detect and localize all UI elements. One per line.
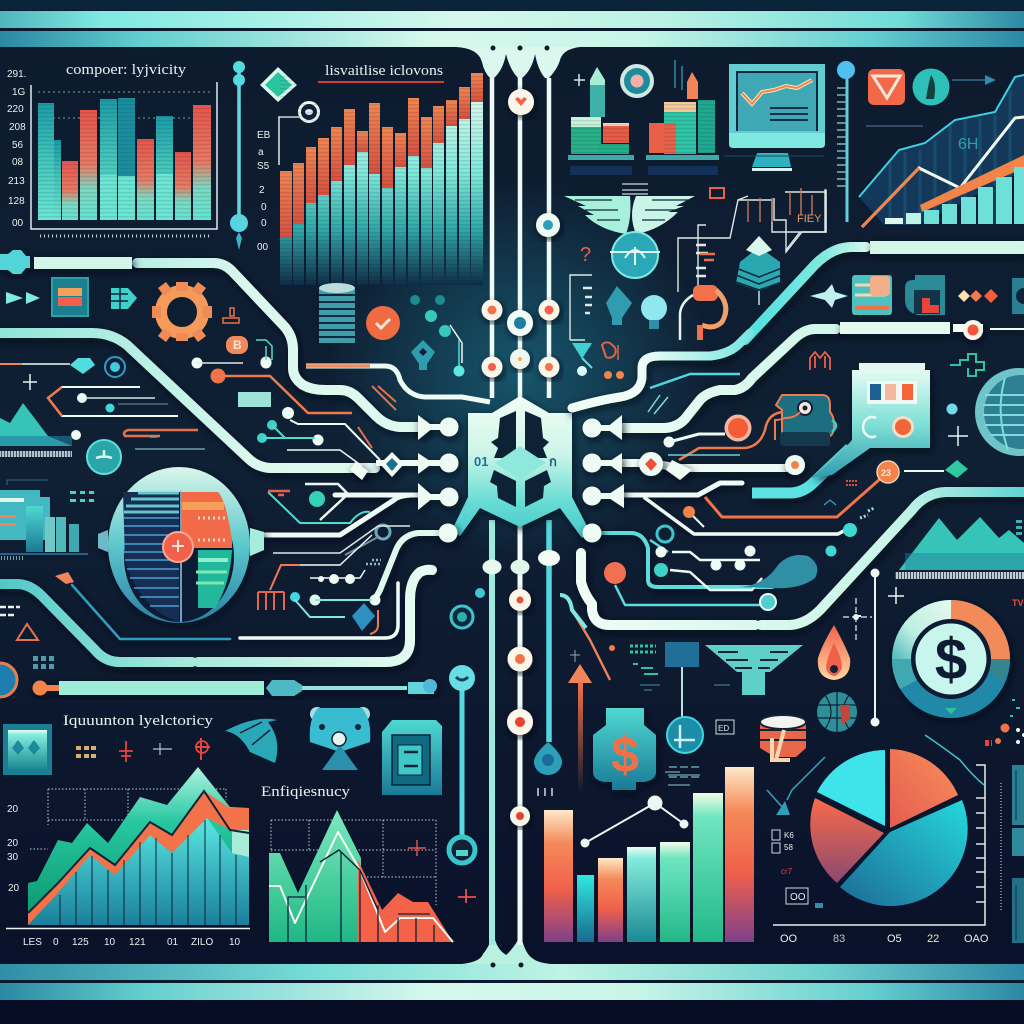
line overlay	[580, 796, 688, 848]
ed tag: ED	[718, 724, 729, 733]
circuit block icon	[775, 395, 836, 446]
y axis labels: 08	[12, 157, 24, 168]
icon: teal button	[87, 440, 121, 474]
x axis labels: ZILO	[191, 937, 213, 948]
mountain chart left	[0, 403, 72, 457]
pie x axis labels	[780, 933, 989, 945]
top frame bands	[0, 0, 1024, 78]
x axis labels: 121	[129, 937, 146, 948]
right-edge blocks	[1012, 765, 1024, 943]
x axis labels: 125	[72, 937, 89, 948]
x axis labels	[23, 937, 241, 948]
right arrow terminals	[582, 415, 805, 542]
small dots bottom right	[985, 700, 1024, 746]
pie side labels: OO	[790, 892, 806, 903]
slider: tick ruler	[837, 61, 855, 222]
chart: top-right line area	[859, 75, 1024, 227]
icon: document	[382, 720, 442, 795]
chart label: 6H	[958, 136, 978, 153]
chart: pie	[810, 749, 968, 906]
slider: vertical cyan	[230, 61, 248, 250]
icon: square card	[52, 278, 88, 316]
y axis labels: 1G	[12, 87, 26, 98]
chart: stacked bars	[257, 63, 483, 285]
hub label left: 01	[474, 454, 488, 469]
icon: layered stack	[736, 236, 782, 291]
icon: hexa pin	[411, 340, 435, 370]
y axis labels: 20	[7, 838, 19, 849]
pie x axis labels: 83	[833, 933, 845, 945]
icon: teal gauge circle	[667, 717, 703, 753]
x axis labels: 10	[229, 937, 241, 948]
top-left connector bar	[0, 250, 132, 274]
y axis labels: a	[258, 147, 264, 158]
ed tag	[716, 720, 734, 734]
icon: card	[852, 275, 892, 315]
schematic dashes	[583, 245, 715, 313]
emblem: t wings	[705, 645, 803, 695]
pie side labels	[772, 830, 823, 908]
icon: mountain square	[3, 724, 52, 775]
orange tip thin wire	[55, 572, 74, 584]
icon: orange cylinder	[760, 715, 806, 760]
left icon row	[6, 278, 464, 376]
pie x axis labels: 22	[927, 933, 939, 945]
icon: orange pipe	[680, 285, 726, 340]
icon: small orange glyph	[223, 308, 239, 323]
chart title: lisvaitlise iclovons	[325, 63, 443, 79]
icon: shell	[225, 719, 277, 763]
icon: mini globe	[817, 692, 857, 732]
icon: bear robot	[310, 707, 370, 770]
icon: folder	[905, 275, 945, 315]
thin right connectors	[560, 374, 944, 680]
x axis labels: 01	[167, 937, 179, 948]
icon: orange b badge	[226, 336, 272, 368]
green-orange small circuit	[258, 484, 410, 634]
right edge fragment text: TV	[1012, 598, 1024, 608]
chart: company liquidity bars	[7, 62, 217, 236]
icon: flame	[818, 625, 850, 680]
icon: teal dollar tag	[593, 708, 656, 790]
right circuit traces	[572, 247, 1024, 625]
thin schematic frames: FIEY	[797, 213, 822, 225]
upper-right block chart 2	[646, 60, 719, 175]
icon: gem	[70, 358, 95, 374]
emblem: wings	[564, 184, 695, 278]
y axis labels: 128	[8, 196, 25, 207]
y axis labels: 20	[7, 804, 19, 815]
small orange and green glyphs right	[572, 342, 984, 518]
globe dashboard	[98, 467, 264, 623]
y axis labels	[257, 130, 271, 253]
orange connectors	[192, 346, 490, 466]
mountain chart right	[895, 517, 1024, 579]
node: orange 23: 23	[881, 468, 891, 478]
orange connector with pale lines	[0, 363, 22, 365]
misc lines near center bottom	[538, 685, 734, 796]
node: orange 23	[877, 461, 899, 483]
icon: edge square	[1012, 278, 1024, 314]
icon: teal dollar tag: $	[611, 727, 639, 783]
device panel	[810, 363, 930, 478]
icon: cylinder	[319, 283, 355, 343]
y axis labels: 291.	[7, 69, 26, 80]
y axis labels: 0	[261, 218, 267, 229]
y axis labels: 00	[257, 242, 269, 253]
pins	[454, 340, 464, 376]
left arrow terminals	[350, 415, 458, 542]
circuit cluster	[48, 387, 205, 449]
upper-right block chart 1	[568, 67, 634, 175]
y axis labels: 0	[261, 202, 267, 213]
bottom-left small icons	[0, 607, 54, 697]
globe right	[975, 368, 1024, 456]
icon: teal pin	[606, 286, 632, 325]
y axis labels: 2	[259, 185, 265, 196]
skyline chart left	[0, 480, 94, 558]
x axis labels: LES	[23, 937, 42, 948]
hub label right: ก	[549, 454, 557, 469]
icon: bulb	[641, 295, 667, 329]
y axis labels: 213	[8, 176, 25, 187]
icon: orange b badge: B	[233, 338, 242, 352]
pie frame and axis	[767, 735, 1001, 925]
y axis labels: 20	[8, 883, 20, 894]
left circuit traces	[0, 263, 445, 662]
icon: orange check	[366, 306, 400, 340]
icon: ring	[105, 357, 125, 377]
bottom frame bands	[0, 940, 1024, 1024]
icon: arrows	[6, 292, 40, 304]
chart: efficiency	[261, 784, 476, 942]
icon: table arrow	[111, 288, 137, 309]
chart: liquidity area	[6, 767, 250, 948]
arrow	[952, 75, 996, 85]
icon: question mark: ?	[580, 244, 591, 266]
section title: lower left: Iquuunton lyelctoricy	[63, 713, 214, 729]
right thick bar with orange node	[840, 241, 1024, 340]
center spines and nodes	[449, 78, 562, 945]
icon: spinning dial	[620, 64, 654, 98]
icon row right upper	[606, 275, 1024, 340]
icon: rectangle on post	[665, 642, 699, 717]
pie side labels: cr7	[781, 867, 793, 876]
pie x axis labels: OAO	[964, 933, 989, 945]
icon: teal circle	[912, 68, 950, 106]
chart title: Enfiqiesnucy	[261, 784, 351, 800]
y axis labels: S5	[257, 161, 270, 172]
icon: orange mail	[868, 69, 905, 105]
teal blob on right circuit	[740, 555, 817, 588]
network dots	[410, 295, 462, 363]
y axis labels	[7, 804, 20, 894]
icon: green diamond	[260, 67, 297, 102]
icon: cross arrow	[810, 284, 848, 308]
x axis labels: 10	[104, 937, 116, 948]
pie side labels: K6	[784, 831, 794, 840]
y axis labels: EB	[257, 130, 271, 141]
sparkle	[23, 374, 37, 390]
chart title: compoer: lyjvicity	[66, 62, 187, 78]
left midsection components	[0, 346, 490, 466]
icon: green gem	[945, 460, 968, 478]
y axis labels: 220	[7, 104, 24, 115]
y axis labels: 30	[7, 852, 19, 863]
gauge pin and sparkles	[843, 568, 904, 726]
small marks row	[76, 738, 210, 762]
chart: bottom bars	[544, 767, 754, 942]
pie x axis labels: OO	[780, 933, 798, 945]
y axis labels	[7, 69, 26, 229]
gauge: dollar	[892, 600, 1010, 718]
dollar sign: $	[935, 627, 967, 692]
bottom-left connector bar	[32, 679, 437, 696]
central glow	[300, 170, 740, 570]
arrow: orange up	[568, 664, 592, 794]
central hub	[452, 396, 590, 538]
pie side labels: 58	[784, 843, 793, 852]
y axis labels: 00	[12, 218, 24, 229]
icon: monitor	[724, 64, 825, 171]
icon: three diamonds	[958, 289, 998, 303]
icon: gear	[152, 282, 212, 342]
y axis labels: 208	[9, 122, 26, 133]
circuit: right drop and bits	[570, 645, 658, 674]
y axis labels: 56	[12, 140, 24, 151]
pie x axis labels: O5	[887, 933, 902, 945]
x axis labels: 0	[53, 937, 59, 948]
thin schematic frames	[570, 188, 826, 340]
